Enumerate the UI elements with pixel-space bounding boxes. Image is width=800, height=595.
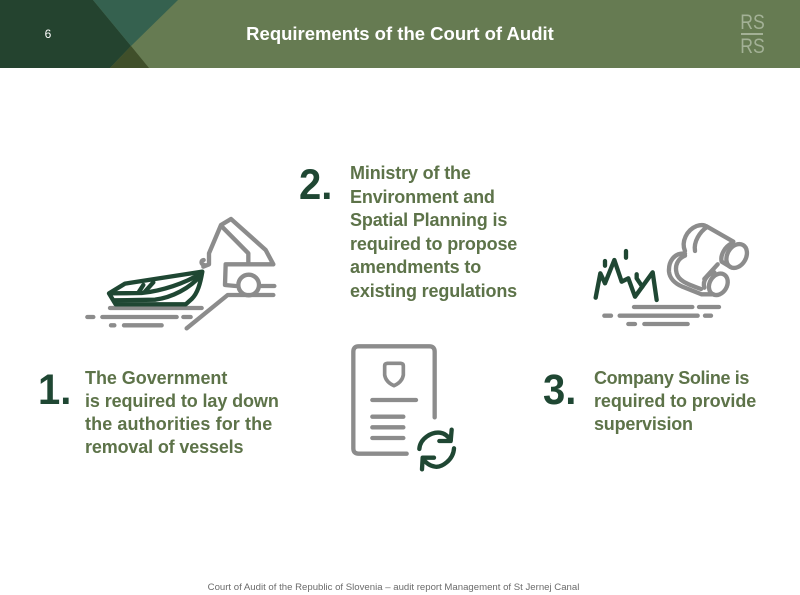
boat xyxy=(109,272,202,304)
header background shapes xyxy=(0,0,800,68)
text: ministry: required to propose xyxy=(350,234,517,254)
text: ministry xyxy=(350,163,517,301)
text: ministry: Spatial Planning is xyxy=(350,210,507,230)
title: Requirements of the Court of Audit xyxy=(246,23,554,44)
refresh arrows xyxy=(419,430,454,469)
logo RS/RS: RS xyxy=(740,11,765,34)
text: company soline: Company Soline is xyxy=(594,368,749,388)
vehicle and crane xyxy=(87,219,274,328)
text: the government: the authorities for the xyxy=(85,414,272,434)
icon: document with refresh arrows xyxy=(351,344,456,472)
text: company soline xyxy=(594,368,756,434)
logo RS/RS xyxy=(740,11,765,58)
icon: binoculars and reeds xyxy=(594,222,750,326)
text: the government: is required to lay down xyxy=(85,391,279,411)
binoculars xyxy=(669,225,751,298)
text: company soline: supervision xyxy=(594,414,693,434)
text: ministry: existing regulations xyxy=(350,281,517,301)
logo RS/RS: RS xyxy=(740,34,765,58)
step 3 xyxy=(543,366,756,434)
document xyxy=(353,346,435,454)
text: ministry: amendments to xyxy=(350,257,481,277)
text: ministry: Ministry of the xyxy=(350,163,471,183)
text: the government: The Government xyxy=(85,368,227,388)
water lines xyxy=(604,307,719,324)
step 1 xyxy=(38,366,279,457)
text: the government xyxy=(85,368,279,457)
number 2: 2. xyxy=(299,161,332,209)
number 3: 3. xyxy=(543,366,576,414)
text: the government: removal of vessels xyxy=(85,437,243,457)
header banner xyxy=(0,0,800,68)
page number: 6 xyxy=(45,27,51,41)
number 1: 1. xyxy=(38,366,71,414)
footer: Court of Audit of the Republic of Slovenia – audit report Management of St Jernej Canal xyxy=(208,582,579,593)
step 2 xyxy=(299,161,517,301)
text: company soline: required to provide xyxy=(594,391,756,411)
text: ministry: Environment and xyxy=(350,187,495,207)
reeds xyxy=(596,251,657,300)
icon: boat being towed by vehicle xyxy=(85,216,276,330)
